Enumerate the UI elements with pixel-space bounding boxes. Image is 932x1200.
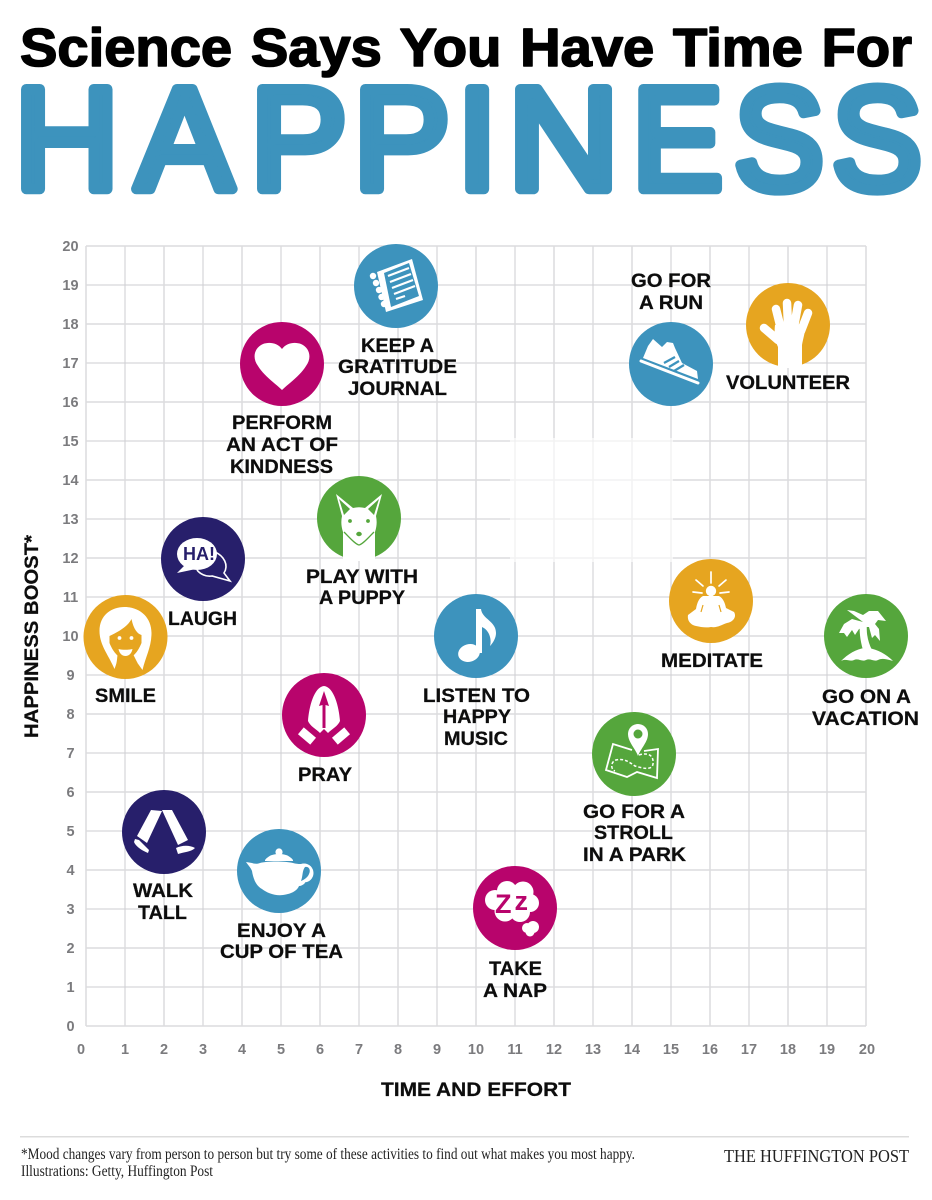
item: listen to happy music [423, 594, 530, 750]
label [812, 686, 919, 730]
label [483, 958, 547, 1002]
icon: heart [240, 322, 324, 406]
label: STROLL [594, 822, 673, 844]
x axis numbers: 11 [507, 1042, 523, 1058]
x axis numbers: 13 [585, 1042, 601, 1058]
label: GO FOR [631, 270, 711, 292]
y axis numbers: 18 [62, 317, 79, 333]
x axis numbers: 5 [277, 1042, 285, 1058]
item: take a nap [473, 866, 557, 1002]
item: pray [282, 673, 366, 786]
label: MUSIC [444, 728, 508, 750]
y axis numbers: 17 [62, 356, 79, 372]
x axis numbers: 10 [468, 1042, 484, 1058]
icon: sleep cloud [473, 866, 557, 950]
icon: running shoe [629, 322, 713, 406]
x axis numbers: 7 [355, 1042, 363, 1058]
title: HAPPINESS: S [832, 58, 922, 220]
x axis numbers: 16 [702, 1042, 718, 1058]
icon: puppy [317, 476, 401, 561]
chart grid [86, 246, 866, 1026]
y axis numbers: 3 [66, 902, 75, 918]
title: Science Says You Have Time For: Science Says You Have Time For [20, 18, 912, 78]
x axis numbers: 2 [160, 1042, 168, 1058]
x axis numbers: 18 [780, 1042, 796, 1058]
label [220, 920, 343, 963]
icon: sleep cloud: Z [495, 889, 512, 919]
label: LAUGH [168, 608, 237, 630]
item: laugh [161, 517, 245, 630]
y axis numbers: 7 [66, 746, 75, 762]
x axis numbers: 0 [77, 1042, 85, 1058]
y axis numbers: 13 [62, 512, 79, 528]
label: GO ON A [822, 686, 911, 708]
credit: The Huffington Post: THE HUFFINGTON POST [724, 1146, 909, 1166]
x axis numbers [77, 1042, 875, 1058]
label: PLAY WITH [306, 566, 418, 588]
label: HAPPY [443, 706, 511, 728]
x axis numbers: 14 [624, 1042, 640, 1058]
footnote: Illustrations: Getty, Huffington Post [21, 1163, 214, 1180]
label: CUP OF TEA [220, 941, 343, 963]
label: IN A PARK [583, 844, 686, 866]
label: KINDNESS [230, 456, 333, 478]
y axis numbers: 20 [62, 239, 79, 255]
item: walk tall [122, 790, 206, 924]
icon: teapot [237, 829, 321, 913]
label [306, 566, 418, 609]
label: AN ACT OF [226, 434, 338, 456]
x axis numbers: 6 [316, 1042, 324, 1058]
label: SMILE [95, 685, 156, 707]
y axis numbers: 14 [62, 473, 79, 489]
icon: music note [434, 594, 518, 678]
label [631, 270, 711, 314]
y axis numbers: 8 [66, 707, 75, 723]
icon: meditating figure [669, 559, 753, 643]
x axis title: TIME AND EFFORT [381, 1079, 571, 1101]
icon: map and pin [592, 712, 676, 796]
item: smile [84, 595, 168, 707]
icon: sleep cloud: z [514, 886, 528, 916]
y axis numbers: 0 [66, 1019, 75, 1035]
icon: palm island [824, 594, 908, 678]
x axis numbers: 9 [433, 1042, 441, 1058]
label: ENJOY A [237, 920, 326, 942]
title: HAPPINESS: E [632, 58, 723, 220]
item: enjoy a cup of tea [220, 829, 343, 963]
icon: woman smiling [84, 595, 168, 679]
label: A PUPPY [319, 587, 405, 609]
y axis numbers: 4 [66, 863, 75, 879]
x axis numbers: 15 [663, 1042, 679, 1058]
label: GRATITUDE [338, 356, 457, 378]
label: TALL [138, 902, 187, 924]
item: meditate [661, 559, 763, 672]
title: HAPPINESS: HAPPI [14, 58, 497, 220]
label: A RUN [639, 292, 703, 314]
icon: notebook [354, 244, 438, 328]
label: TAKE [489, 958, 542, 980]
x axis numbers: 20 [859, 1042, 875, 1058]
label: A NAP [483, 980, 547, 1002]
label: LISTEN TO [423, 685, 530, 707]
y axis numbers: 15 [62, 434, 79, 450]
label [583, 801, 686, 866]
y axis numbers: 6 [66, 785, 75, 801]
x axis numbers: 17 [741, 1042, 757, 1058]
label: PERFORM [232, 412, 332, 434]
y axis numbers [62, 239, 79, 1035]
label: PRAY [298, 764, 352, 786]
label: KEEP A [361, 335, 434, 357]
y axis numbers: 11 [63, 590, 78, 606]
icon: praying hands [282, 673, 366, 757]
label [338, 335, 457, 400]
y axis numbers: 10 [62, 629, 79, 645]
label [423, 685, 530, 750]
footnote: *Mood changes vary from person to person but try some of these activities to find out what makes you most happy. [21, 1146, 635, 1163]
title: HAPPINESS: S [734, 58, 824, 220]
item: play with a puppy [306, 476, 418, 609]
y axis numbers: 12 [62, 551, 79, 567]
y axis title: HAPPINESS BOOST* [21, 535, 43, 738]
x axis numbers: 8 [394, 1042, 402, 1058]
label: GO FOR A [583, 801, 685, 823]
label [226, 412, 338, 478]
label [133, 880, 193, 924]
x axis numbers: 19 [819, 1042, 835, 1058]
y axis numbers: 19 [62, 278, 79, 294]
label: MEDITATE [661, 650, 763, 672]
item: go for a stroll in a park [583, 712, 686, 866]
y axis numbers: 1 [66, 980, 75, 996]
icon: walking legs [122, 790, 206, 874]
x axis numbers: 3 [199, 1042, 207, 1058]
y axis numbers: 9 [66, 668, 75, 684]
item: volunteer [726, 283, 850, 394]
item: perform an act of kindness [226, 322, 338, 478]
y axis numbers: 2 [66, 941, 75, 957]
label: VOLUNTEER [726, 372, 850, 394]
item: keep a gratitude journal [338, 244, 457, 400]
x axis numbers: 4 [238, 1042, 246, 1058]
icon: raised hand [746, 283, 830, 368]
label: JOURNAL [348, 378, 447, 400]
item: go on a vacation [812, 594, 919, 730]
label: VACATION [812, 708, 919, 730]
icon: speech bubbles: HA! [183, 544, 215, 564]
x axis numbers: 12 [546, 1042, 562, 1058]
y axis numbers: 5 [66, 824, 75, 840]
y axis numbers: 16 [62, 395, 79, 411]
label: WALK [133, 880, 193, 902]
title: HAPPINESS: N [508, 58, 619, 220]
item: go for a run [629, 270, 713, 406]
footnote [21, 1146, 635, 1180]
x axis numbers: 1 [121, 1042, 129, 1058]
